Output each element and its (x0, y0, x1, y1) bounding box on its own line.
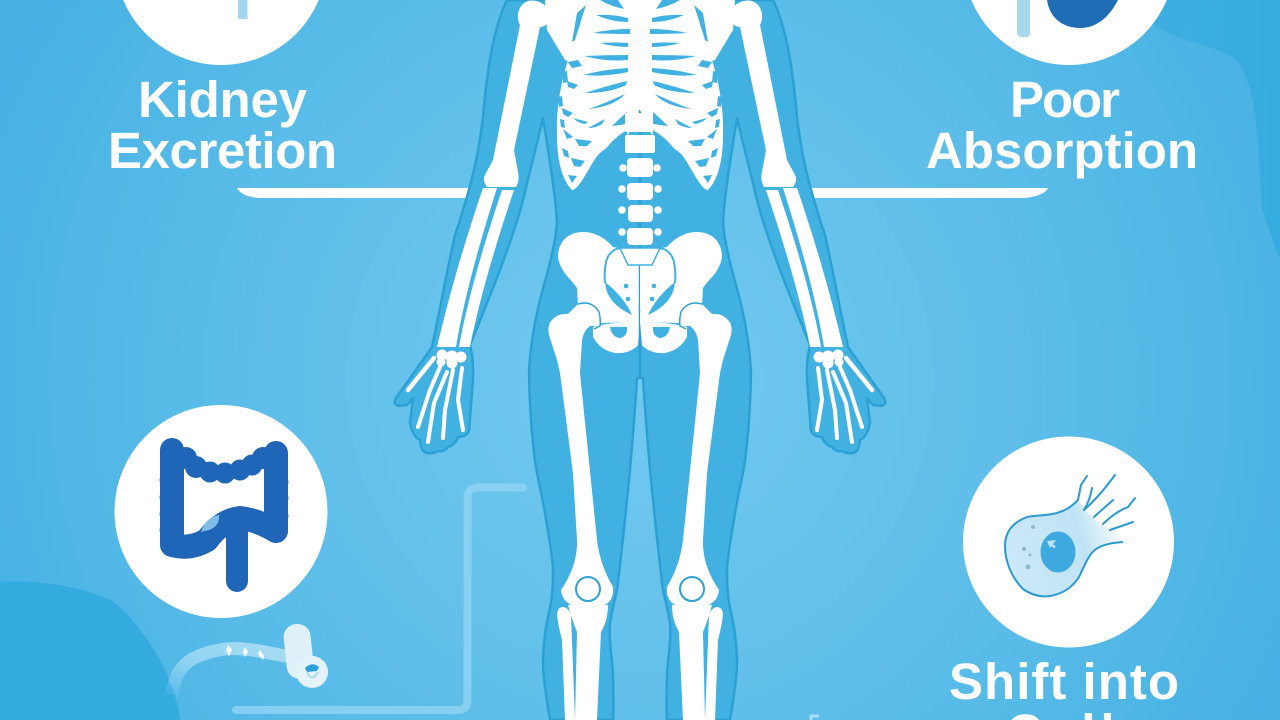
sacrum outline (605, 248, 620, 283)
left half of figure (395, 0, 642, 720)
icon: nucleus highlight (1047, 540, 1056, 548)
pelvis crescent (605, 282, 632, 315)
icon: colon highlight (201, 515, 219, 532)
obturator opening (610, 327, 627, 338)
sternum (630, 0, 650, 110)
femur head outline (578, 303, 600, 329)
label: Shift into Cells: Shift into (949, 653, 1179, 710)
label: Kidney Excretion (108, 71, 337, 179)
connector tick: bottom right (811, 716, 819, 720)
femur (548, 304, 613, 604)
ischium ring (593, 322, 640, 353)
label: Poor Absorption: Absorption (926, 122, 1198, 179)
label: Poor Absorption (926, 71, 1198, 179)
connector line: upper right (810, 188, 1048, 198)
body silhouette (395, 0, 640, 720)
label: Kidney Excretion: Kidney (138, 71, 308, 128)
right half of figure (638, 0, 885, 720)
icon: colon (160, 447, 288, 581)
icon: cell body (1005, 500, 1123, 596)
background blob: bottom left (0, 582, 180, 720)
icon: cell filaments (1078, 475, 1135, 530)
icon: cell granules (1022, 525, 1035, 570)
hand bones (408, 350, 466, 442)
ribcage (557, 0, 640, 190)
shoulder and scapula (545, 0, 590, 62)
label: Kidney Excretion: Excretion (108, 122, 337, 179)
rib gaps (558, 0, 630, 183)
connector line: upper left (237, 188, 470, 198)
spine (618, 113, 662, 265)
label: Poor Absorption: Poor (1010, 71, 1120, 128)
circle: kidney excretion (115, 0, 327, 65)
circle: cell icon (963, 436, 1174, 648)
tibia (568, 602, 608, 720)
patella (576, 577, 600, 601)
fibula (557, 607, 575, 720)
sacral holes (624, 284, 642, 311)
pelvis wing (558, 232, 640, 323)
radius and ulna (437, 188, 514, 347)
body figure with skeleton (395, 0, 885, 720)
humerus (484, 0, 550, 187)
circle: colon icon (114, 405, 328, 618)
connector line: lower left (236, 488, 523, 710)
icon: cell nucleus (1040, 532, 1076, 572)
circle: poor absorption (963, 0, 1175, 65)
icon: cell outline (1005, 500, 1123, 596)
background blob: top right (1130, 0, 1280, 260)
intestine illustration (172, 623, 328, 695)
